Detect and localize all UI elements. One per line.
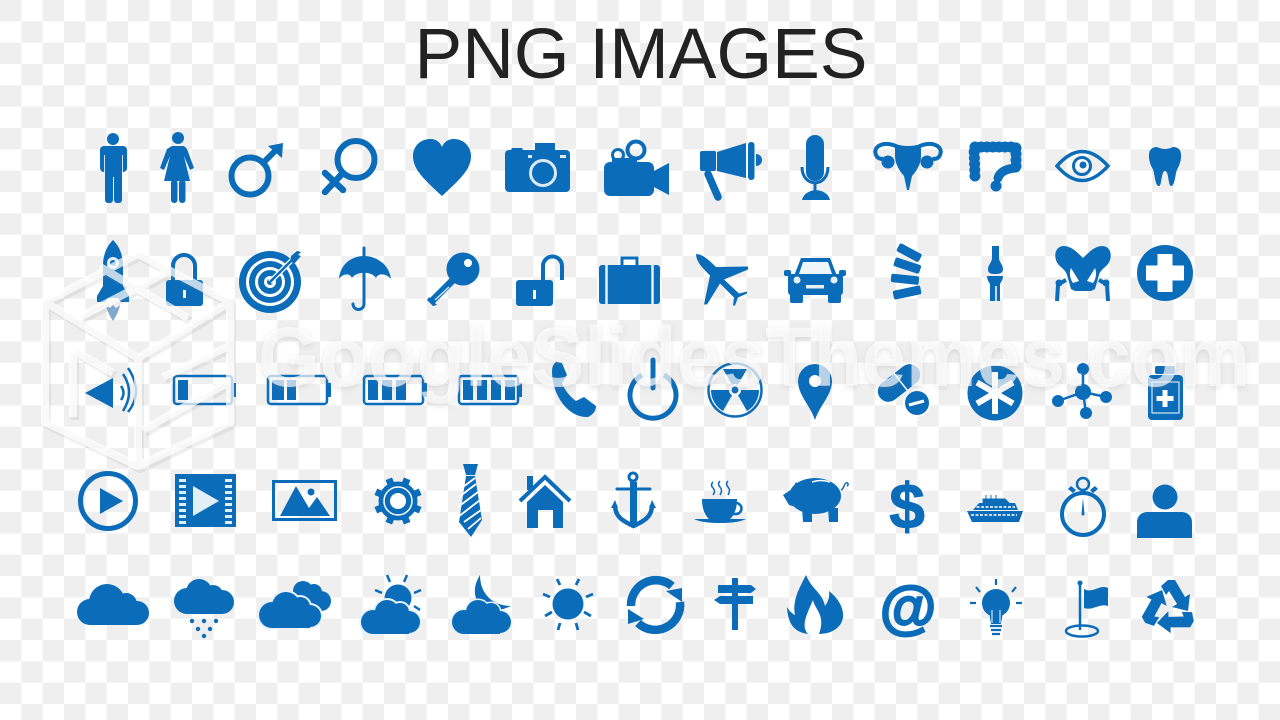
- icon: pelvis: [1055, 246, 1111, 301]
- icon: female symbol: [325, 141, 374, 192]
- icon: play button: [80, 474, 136, 528]
- icon: moon behind cloud: [452, 575, 511, 634]
- icon: at sign: @: [880, 575, 936, 640]
- icon: piggy bank: [783, 478, 848, 522]
- icon: colon: [974, 147, 1016, 192]
- icon: car: [784, 258, 846, 303]
- icon: megaphone: [700, 142, 762, 197]
- icon: umbrella: [339, 248, 391, 310]
- icon: gear: [367, 470, 429, 532]
- icon: key: [427, 252, 480, 306]
- icon: light bulb: [970, 579, 1022, 634]
- icon: telephone: [552, 362, 596, 417]
- icon: male symbol: [232, 143, 283, 194]
- icon: woman: [160, 132, 194, 203]
- icon: cruise ship: [967, 495, 1023, 522]
- icon: map pin: [798, 364, 832, 420]
- icon grid: [77, 132, 1197, 640]
- icon: rain cloud: [174, 579, 234, 638]
- icon: battery one cell: [174, 376, 236, 404]
- icon: cloud: [77, 584, 149, 625]
- icon: sun behind cloud: [361, 575, 421, 634]
- icon: man: [100, 133, 127, 203]
- icon: medical star: [968, 366, 1022, 420]
- icon: knee joint: [987, 246, 1003, 301]
- icon: battery three cells: [364, 376, 427, 404]
- icon: airplane: [696, 254, 748, 306]
- icon: power button: [630, 360, 676, 418]
- icon: open padlock: [516, 256, 562, 306]
- icon: briefcase: [599, 258, 660, 304]
- icon: molecule: [1052, 363, 1112, 419]
- watermark text: GoogleSlidesThemes.com: [258, 310, 1250, 404]
- watermark logo: isometric box: [45, 254, 232, 469]
- icon: two clouds: [259, 581, 331, 628]
- icon: target: [239, 251, 301, 313]
- icon: speaker: [85, 368, 136, 412]
- icon: microphone: [802, 135, 830, 200]
- icon: signpost: [714, 578, 756, 630]
- icon: heart: [413, 139, 471, 196]
- icon: pills: [873, 360, 931, 417]
- icon: film strip: [175, 474, 236, 527]
- icon: radiation: [708, 364, 762, 416]
- icon: spine: [891, 243, 922, 300]
- watermark text: GoogleSlidesThemes.com: [258, 312, 1250, 406]
- icon: tooth: [1149, 147, 1181, 186]
- icon: eye: [1057, 152, 1108, 180]
- icon: battery four cells: [459, 376, 522, 404]
- icon: medical cross: [1137, 245, 1193, 301]
- icon: coffee cup: [694, 481, 746, 523]
- icon: anchor: [611, 473, 656, 528]
- icon: medicine bottle: [1148, 366, 1183, 420]
- icon: house: [520, 476, 570, 528]
- icon: fire: [787, 575, 843, 634]
- icon: video camera: [604, 142, 669, 196]
- icon: necktie: [458, 464, 482, 537]
- icon: padlock: [166, 255, 203, 306]
- icon: refresh arrows: [628, 580, 682, 630]
- icon: camera: [505, 143, 570, 192]
- icon: sun: [543, 579, 593, 630]
- icon: dollar sign: $: [889, 470, 925, 542]
- icon: picture: [274, 482, 336, 520]
- title: PNG IMAGES: [415, 14, 867, 94]
- icon: flag: [1066, 580, 1108, 636]
- icon: recycle: [1134, 580, 1197, 640]
- icon: person: [1137, 484, 1192, 538]
- icon: stopwatch: [1062, 478, 1104, 535]
- icon: uterus: [875, 144, 941, 190]
- icon: rocket: [97, 240, 129, 321]
- icon: battery two cells: [268, 376, 331, 404]
